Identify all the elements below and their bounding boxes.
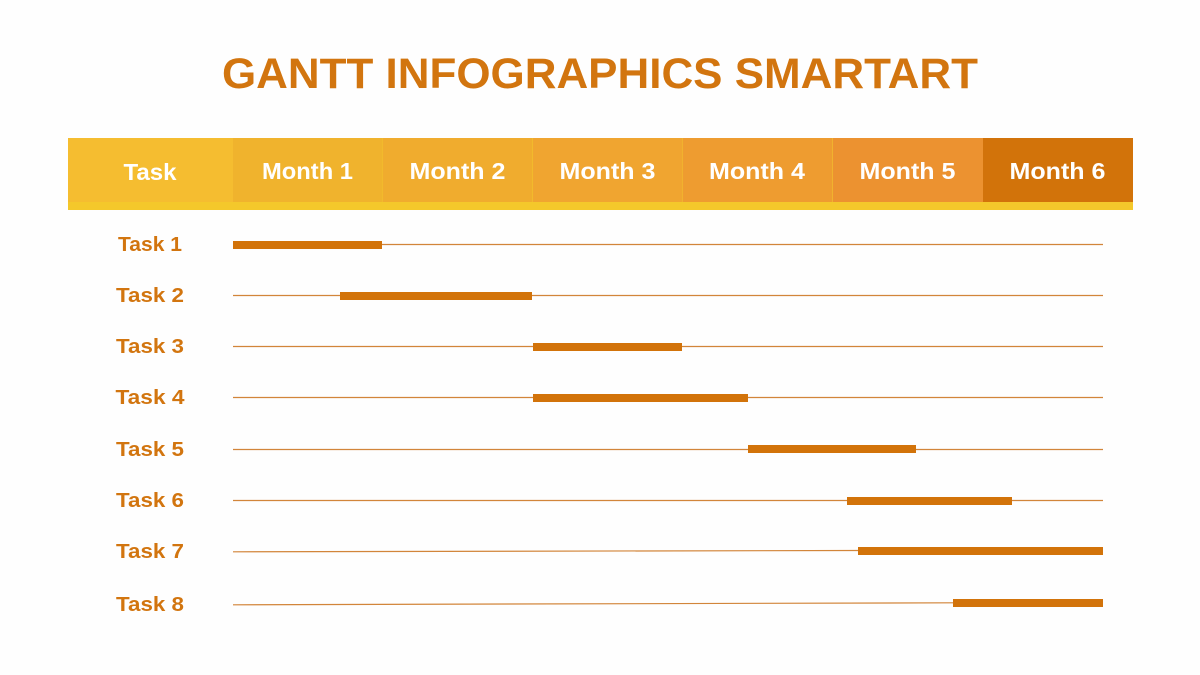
row: Task 3: Task 3 xyxy=(116,336,184,358)
row: Task 3 xyxy=(116,336,1103,358)
row: Task 7: Task 7 xyxy=(116,541,184,563)
row: Task 2: Task 2 xyxy=(116,285,184,307)
row: Task 1: Task 1 xyxy=(118,234,182,256)
header cell: Month 2: Month 2 xyxy=(410,158,506,184)
header cell: Month 3: Month 3 xyxy=(560,158,656,184)
row: Task 2 xyxy=(116,285,1103,307)
header cell: Month 4 xyxy=(682,138,832,202)
row: Task 7 xyxy=(116,541,1103,563)
header cell: Month 4: Month 4 xyxy=(709,158,805,184)
row: Task 6: Task 6 xyxy=(116,490,184,512)
header cell: Month 1: Month 1 xyxy=(262,158,353,184)
header cell: Month 2 xyxy=(382,138,532,202)
title: GANTT INFOGRAPHICS SMARTART xyxy=(222,50,978,98)
row: Task 8: Task 8 xyxy=(116,594,184,616)
header cell: Task xyxy=(68,138,233,202)
header base strip xyxy=(68,138,1133,210)
header cell: Month 6 xyxy=(983,138,1133,202)
header cell: Month 6: Month 6 xyxy=(1010,158,1106,184)
row: Task 8 xyxy=(116,594,1103,616)
header cell: Month 5: Month 5 xyxy=(860,158,956,184)
header cell: Month 1 xyxy=(233,138,382,202)
row: Task 1 xyxy=(118,234,1103,256)
row: Task 5: Task 5 xyxy=(116,439,184,461)
row: Task 4: Task 4 xyxy=(116,387,185,409)
row: Task 5 xyxy=(116,439,1103,461)
header row xyxy=(68,138,1133,210)
header cell: Month 3 xyxy=(533,138,682,202)
header cell: Month 5 xyxy=(833,138,983,202)
header cell: Task: Task xyxy=(124,159,177,185)
row: Task 6 xyxy=(116,490,1103,512)
row: Task 4 xyxy=(116,387,1103,409)
